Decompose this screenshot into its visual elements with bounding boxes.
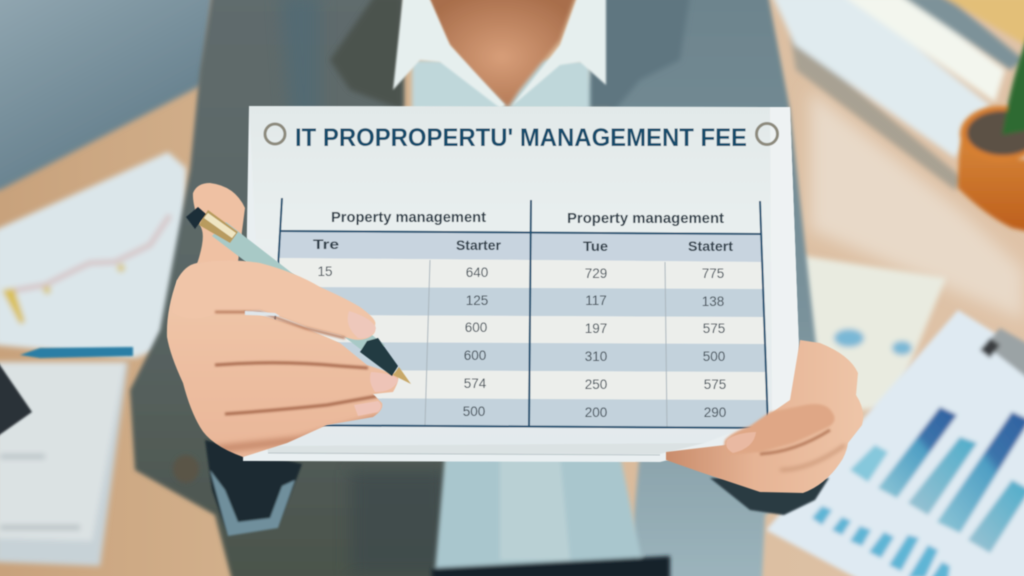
woman: shirt — [412, 60, 670, 576]
table headings — [331, 210, 724, 227]
table values: 500 — [463, 404, 485, 419]
table values: 575 — [703, 321, 725, 336]
sliver of sheet between fingers — [245, 311, 280, 316]
background: blue pen — [20, 347, 133, 358]
table values: 600 — [465, 320, 487, 335]
right hand — [666, 340, 863, 493]
fingers behind sheet — [666, 340, 863, 493]
background: potted plant — [958, 30, 1024, 232]
table values: 138 — [702, 294, 724, 309]
table column labels: Starter — [456, 238, 502, 253]
table values: 575 — [704, 377, 726, 392]
left cuff — [205, 440, 302, 536]
pen — [186, 207, 411, 384]
lower finger crease — [780, 445, 845, 470]
table column labels — [313, 237, 734, 254]
woman: shirt collar — [393, 0, 606, 108]
background: tablet at top left — [0, 0, 214, 190]
left hand: thumb — [193, 183, 245, 264]
table values: 775 — [702, 266, 724, 281]
table values: 500 — [703, 349, 725, 364]
eyelet left — [265, 124, 285, 144]
table values: 200 — [585, 405, 607, 420]
bar 5 — [968, 480, 1024, 553]
table values: 600 — [464, 348, 486, 363]
background: clipboard with bar chart — [766, 310, 1024, 576]
panel: held fee sheet — [243, 106, 801, 462]
pen cap end — [186, 207, 206, 229]
column dividers — [425, 260, 667, 427]
background: window and sill at top right — [772, 0, 1024, 190]
title: IT PROPROPERTU' MANAGEMENT FEE — [295, 124, 747, 152]
table values: 574 — [464, 376, 487, 391]
bar 1 — [850, 445, 888, 482]
table rows left — [267, 231, 531, 426]
bar 3 — [908, 437, 977, 515]
background: notebook stack — [0, 362, 128, 566]
eyelet right — [756, 124, 778, 144]
background: line chart sheet — [0, 152, 186, 358]
table column labels: Tre — [313, 237, 340, 252]
right cuff — [710, 478, 829, 515]
table values: 15 — [317, 264, 333, 279]
table headings: Property management — [331, 210, 486, 226]
table values: 125 — [466, 293, 488, 308]
table values: 250 — [585, 377, 607, 392]
bar 2 — [878, 407, 957, 498]
table column labels: Statert — [688, 239, 734, 254]
table values — [317, 264, 726, 420]
pen grip dark — [360, 338, 398, 376]
pen body — [212, 222, 385, 358]
background: black device — [0, 358, 32, 438]
table values: 310 — [585, 349, 607, 364]
table values: 640 — [466, 265, 488, 280]
left hand: lower fingers — [167, 280, 398, 457]
table column labels: Tue — [583, 239, 609, 254]
table values: 729 — [585, 266, 607, 281]
thumb nail — [726, 432, 756, 453]
table values: 197 — [585, 321, 607, 336]
ring fingernail — [370, 372, 398, 392]
palm and knuckles — [167, 280, 398, 457]
table headings: Property management — [567, 211, 724, 227]
table rows right — [529, 233, 768, 427]
bar 4 — [937, 412, 1024, 533]
index crease — [215, 312, 345, 338]
thumb — [724, 404, 835, 455]
background: pale desk glow — [810, 90, 1024, 320]
woman: neck — [427, 0, 576, 108]
background: small chart sheet — [798, 255, 946, 410]
table values: 117 — [585, 293, 607, 308]
finger crease — [760, 430, 830, 454]
soft finger shading — [210, 363, 380, 450]
pen collar gold — [199, 210, 238, 243]
index fingernail — [348, 311, 376, 338]
table values: 290 — [704, 405, 726, 420]
small bars — [812, 506, 950, 576]
left hand: index finger — [172, 260, 376, 340]
table — [267, 198, 768, 428]
pen tip gold — [393, 367, 411, 384]
woman: blazer — [130, 0, 830, 576]
pinky fingernail — [354, 401, 381, 416]
blazer button — [173, 455, 199, 483]
table rules — [267, 198, 768, 428]
